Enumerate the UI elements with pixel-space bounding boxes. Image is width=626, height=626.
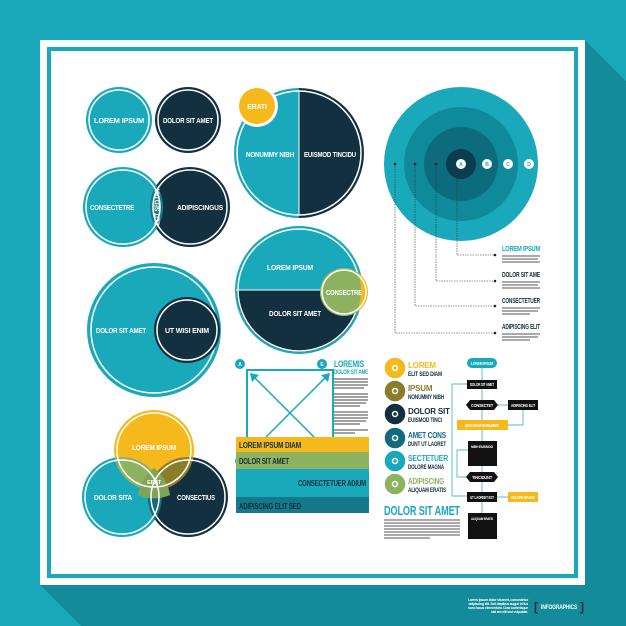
square arrows diagram: A [238,362,242,368]
concentric circles: B [485,162,489,168]
venn two circles: ELIT SED DIA [154,189,162,225]
text block: loremis: LOREMIS [334,359,364,369]
square arrows diagram: I [239,459,241,465]
big circle with inner: UT WISI ENIM [165,326,209,335]
venn three circles [82,410,228,537]
flowchart: NIBH EUISMOD [471,444,493,449]
venn two circles: ADIPISCINGUS [177,203,223,212]
footer text: [ [534,600,538,614]
ribbon bars: LOREM IPSUM DIAM [239,441,301,450]
text block: loremis: DOLOR SIT AME [334,370,368,376]
legend list: ALIQUAM ERATIS [408,488,446,494]
big circle with inner: DOLOR SIT AMET [96,326,146,335]
circle: lorem ipsum [86,87,152,153]
footer text [468,598,584,614]
labels for concentric: LOREM IPSUM [502,246,540,253]
flowchart: TINCIDUNT [472,475,492,480]
legend list [384,357,450,495]
concentric circles: C [506,162,510,168]
half circle chart: CONSECTRE [326,290,362,297]
legend list: ADIPISCING [408,477,444,486]
footer text: ] [580,600,584,614]
frame [40,40,585,585]
venn three circles: CONSECTIUS [177,493,215,502]
labels for concentric: ADIPISCING ELIT [502,324,541,331]
half circle chart [230,226,370,360]
pie chart [234,85,364,218]
flowchart: LOREM IPSUM [471,361,493,366]
ribbon bars: ADIPISCING ELIT SED [239,502,301,511]
legend list: DUNT UT LAORET [408,442,446,448]
big circle with inner [87,263,221,397]
legend list: SECTETUER [408,454,448,463]
legend list: IPSUM [408,384,433,393]
circle: lorem ipsum: LOREM IPSUM [94,116,144,125]
venn two circles: CONSECTETRE [90,203,134,212]
concentric circles [384,87,538,334]
venn three circles: LOREM IPSUM [132,443,176,452]
legend list: EUISMOD TINCI [408,418,442,424]
flowchart: DOLORE MAGNA [511,495,536,500]
text block: loremis [334,359,368,433]
labels for concentric [502,246,541,340]
legend list: ELIT SED DIAM [408,372,442,378]
flowchart: CONSECTET [471,403,493,408]
ribbon bars: DOLOR SIT AMET [239,457,289,466]
concentric circles: A [459,162,463,168]
footer text: Lorem ipsum dolor sit amet, consectetur [468,598,529,602]
footer text: nunc lacus elementum. Cras scelerisque [468,606,528,610]
flowchart: ALIQUAM ERATIS [471,516,493,521]
heading: dolor sit amet: DOLOR SIT AMET [384,503,460,518]
legend list: DOLOR SIT [408,407,450,416]
venn three circles: DOLOR SITA [94,493,133,502]
half circle chart: LOREM IPSUM [267,263,313,272]
concentric circles: D [527,162,531,168]
labels for concentric: CONSECTETUER [502,298,540,305]
footer text: INFOGRAPHICS [541,605,577,611]
legend list: NONUMMY NIBH [408,395,444,401]
labels for concentric: DOLOR SIT AME [502,272,540,279]
venn three circles: ERAT [147,480,162,486]
venn two circles [83,167,230,247]
flowchart: UT LAOREET EST [470,495,494,500]
heading: dolor sit amet [384,503,460,538]
flowchart: ADIPISCING ELIT [511,403,535,408]
flowchart: SED DIAM NONUMMY [465,423,499,428]
ribbon bars: CONSECTETUER ADIUM [298,479,366,488]
footer text: nisl am elit sed vulputate. [491,610,528,614]
pie chart: EUISMOD TINCIDU [304,150,356,159]
square arrows diagram: O [320,459,324,465]
flowchart: DOLOR SIT AMET [470,382,494,387]
pie chart: NONUMMY NIBH [246,150,294,159]
circle: dolor sit amet [155,87,221,153]
ribbon bars [236,437,369,513]
flowchart [452,358,538,539]
square arrows diagram [235,359,333,466]
square arrows diagram: E [320,362,324,368]
half circle chart: DOLOR SIT AMET [269,309,322,318]
legend list: LOREM [408,361,436,370]
footer text: adipiscing elit. Sed dapibus augue id fus [469,602,528,606]
legend list: DOLORE MAGNA [408,465,445,471]
pie chart: ERATI [247,104,267,111]
circle: dolor sit amet: DOLOR SIT AMET [163,116,213,125]
legend list: AMET CONS [408,431,447,440]
